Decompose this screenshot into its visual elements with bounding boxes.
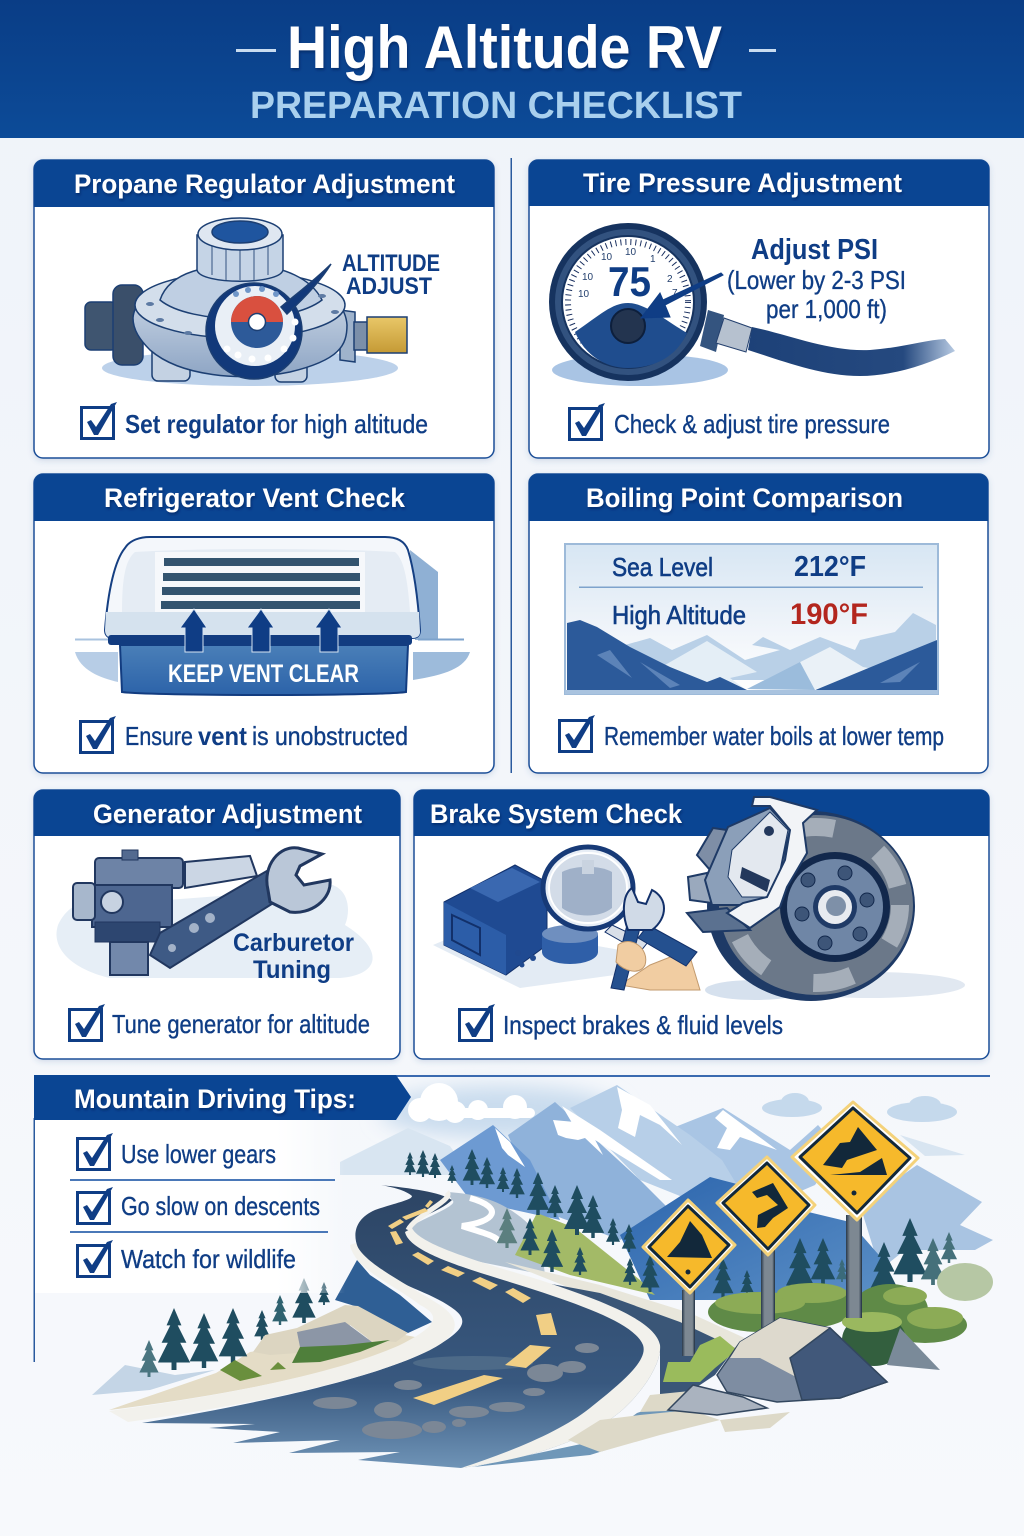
vent label: KEEP VENT CLEAR (168, 660, 359, 688)
sea level row (612, 551, 866, 583)
left trees (139, 1278, 330, 1377)
icon: gauge and hose (549, 223, 955, 386)
high altitude row (612, 598, 868, 631)
heading: Propane Regulator Adjustment (74, 169, 455, 199)
callout: ADJUST (346, 273, 432, 300)
tip: lower gears (78, 1133, 276, 1170)
arrows (180, 609, 342, 652)
checklist item: Set regulator (125, 409, 265, 439)
carburetor label (233, 929, 354, 984)
checklist item (80, 716, 408, 752)
heading: Boiling Point Comparison (586, 483, 903, 513)
panel: refrigerator vent (34, 474, 494, 773)
callout (342, 250, 440, 300)
icon: gauge and hose: 10 (582, 272, 594, 283)
sign: curve (717, 1157, 815, 1255)
panel: mountain driving tips (34, 1075, 990, 1362)
foreground rocks (668, 1318, 887, 1415)
icon: regulator (85, 218, 407, 386)
callout: Adjust PSI (751, 234, 878, 266)
sign posts (682, 1215, 862, 1356)
checklist item: Remember water boils at lower temp (604, 721, 944, 751)
panel: propane regulator (34, 160, 494, 458)
icon: gauge and hose: 10 (625, 247, 637, 258)
high altitude row: High Altitude (612, 600, 746, 630)
illustration: mountain road scene (92, 1083, 993, 1468)
gauge reading: 75 (608, 258, 651, 305)
road patches (313, 1343, 599, 1439)
green slope (515, 1213, 655, 1295)
foreground rubble (568, 1390, 790, 1452)
icon: brake disc and caliper (687, 797, 965, 1001)
carburetor label: Tuning (253, 956, 331, 984)
checklist item: Inspect brakes & fluid levels (503, 1010, 783, 1040)
back trees (404, 1149, 957, 1298)
sea level row: Sea Level (612, 552, 713, 582)
comparison chart (565, 544, 938, 694)
checklist item (570, 403, 890, 440)
title banner (0, 0, 1024, 138)
subtitle: PREPARATION CHECKLIST (250, 85, 742, 127)
icon: gauge and hose: 10 (601, 252, 613, 263)
small front bush (663, 1336, 737, 1382)
callout: per 1,000 ft) (766, 294, 887, 324)
checklist item (82, 402, 428, 439)
checklist item: Tune generator for altitude (112, 1009, 370, 1039)
checklist item: vent (198, 721, 247, 751)
checklist item (460, 1004, 783, 1040)
checklist item (70, 1004, 370, 1040)
panel: boiling point (529, 474, 988, 773)
icon: gauge and hose: 10 (578, 289, 590, 300)
checklist item: Check & adjust tire pressure (614, 409, 890, 439)
heading: Tire Pressure Adjustment (583, 168, 902, 198)
sign: steep terrain (643, 1200, 735, 1293)
grey slope (408, 1192, 545, 1275)
icon: roof vent (75, 537, 470, 695)
tip: lower gears: Use lower gears (121, 1139, 276, 1169)
icon: gauge and hose: 2 (667, 274, 673, 285)
sky wash (380, 1086, 620, 1138)
road edge lines (408, 1192, 448, 1230)
panel: brake system (414, 790, 989, 1059)
road dashes (388, 1200, 557, 1405)
left ground (92, 1260, 432, 1410)
left rocks (220, 1305, 408, 1381)
winding road (109, 1185, 760, 1468)
column divider (510, 158, 512, 773)
checklist item: is unobstructed (252, 721, 408, 751)
callout: ALTITUDE (342, 250, 440, 277)
icon: carburetor and wrench (57, 848, 373, 978)
carburetor label: Carburetor (233, 929, 354, 957)
mountains (340, 1085, 993, 1300)
tip: descents: Go slow on descents (121, 1191, 320, 1221)
tip: wildlife (78, 1240, 296, 1276)
sea level row: 212°F (794, 551, 866, 583)
checklist item (560, 715, 944, 752)
bushes (708, 1263, 993, 1370)
checklist item: for high altitude (271, 409, 428, 439)
tip: descents (78, 1187, 320, 1224)
icon: fluid reservoir and magnifier (433, 847, 700, 990)
sign: falling rocks (792, 1102, 918, 1220)
title: High Altitude RV (287, 14, 722, 81)
panel: generator (34, 790, 400, 1059)
callout (727, 234, 906, 324)
heading: Mountain Driving Tips: (74, 1084, 356, 1114)
arrow (641, 273, 723, 318)
heading: Generator Adjustment (93, 799, 362, 829)
callout: (Lower by 2-3 PSI (727, 265, 906, 295)
panel: tire pressure (529, 160, 989, 458)
checklist item: Ensure (125, 721, 193, 751)
tip: wildlife: Watch for wildlife (121, 1244, 296, 1274)
icon: gauge and hose: 1 (650, 254, 656, 265)
clouds (408, 1083, 957, 1123)
heading: Refrigerator Vent Check (104, 483, 406, 513)
high altitude row: 190°F (790, 598, 868, 631)
icon: gauge and hose: 7 (672, 288, 678, 299)
heading: Brake System Check (430, 799, 683, 829)
